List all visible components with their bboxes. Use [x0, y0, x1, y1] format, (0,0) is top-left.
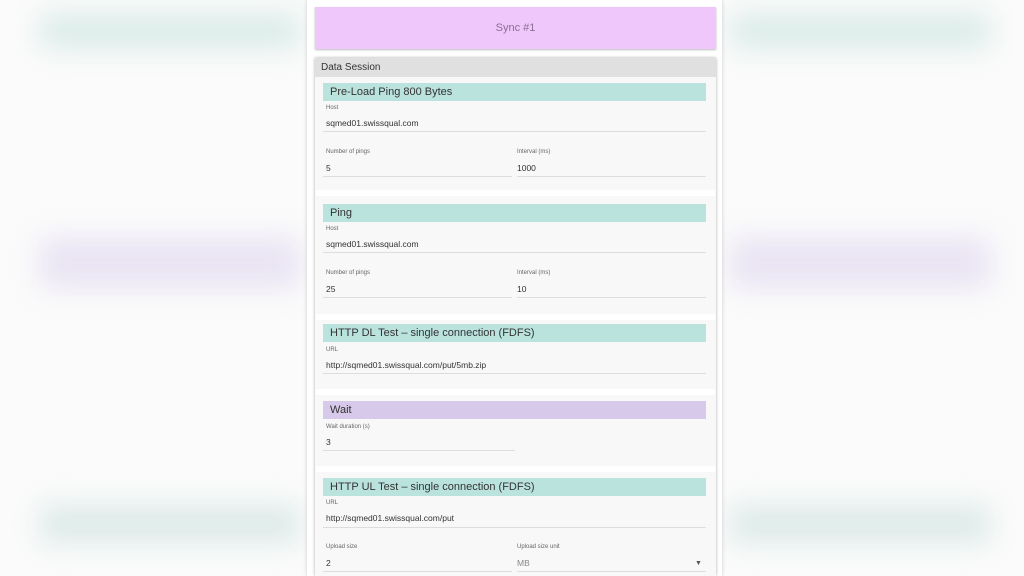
section: ping [323, 204, 706, 298]
sync header [315, 7, 716, 49]
section: ping: Number of pings [326, 270, 370, 276]
section: http ul: Upload size [326, 544, 357, 550]
section: ping: sqmed01.swissqual.com [326, 239, 419, 249]
data session card [315, 58, 716, 576]
section: pre-load ping [323, 83, 706, 177]
section: http ul: ▼ [695, 560, 702, 567]
section: http ul: Upload size unit [517, 544, 560, 550]
section: ping: Interval (ms) [517, 270, 550, 276]
section: http ul: http://sqmed01.swissqual.com/put [326, 513, 454, 523]
section: pre-load ping: Pre-Load Ping 800 Bytes [330, 86, 452, 98]
section: pre-load ping: 1000 [517, 163, 536, 173]
section: pre-load ping: Number of pings [326, 149, 370, 155]
section: http ul: MB [517, 558, 530, 568]
section: wait [323, 401, 706, 451]
center panel [307, 0, 722, 576]
section: wait: 3 [326, 437, 331, 447]
section: ping: 25 [326, 284, 335, 294]
section: pre-load ping: sqmed01.swissqual.com [326, 118, 419, 128]
section: wait: Wait duration (s) [326, 424, 370, 430]
section: http dl: URL [326, 347, 338, 353]
section: wait: Wait [330, 404, 352, 416]
section: ping: Ping [330, 207, 352, 219]
section: http ul: URL [326, 500, 338, 506]
sync header: Sync #1 [496, 22, 535, 34]
section: ping: 10 [517, 284, 526, 294]
section: http dl: HTTP DL Test – single connection (FDFS) [330, 327, 535, 339]
section: pre-load ping: Host [326, 105, 338, 111]
section: http ul: HTTP UL Test – single connection (FDFS) [330, 481, 535, 493]
section: http ul [323, 478, 706, 572]
section: http dl: http://sqmed01.swissqual.com/put/5mb.zip [326, 360, 486, 370]
section: pre-load ping: 5 [326, 163, 331, 173]
section: ping: Host [326, 226, 338, 232]
data session card: Data Session [321, 62, 380, 73]
section: http dl [323, 324, 706, 374]
section: pre-load ping: Interval (ms) [517, 149, 550, 155]
section: http ul: 2 [326, 558, 331, 568]
